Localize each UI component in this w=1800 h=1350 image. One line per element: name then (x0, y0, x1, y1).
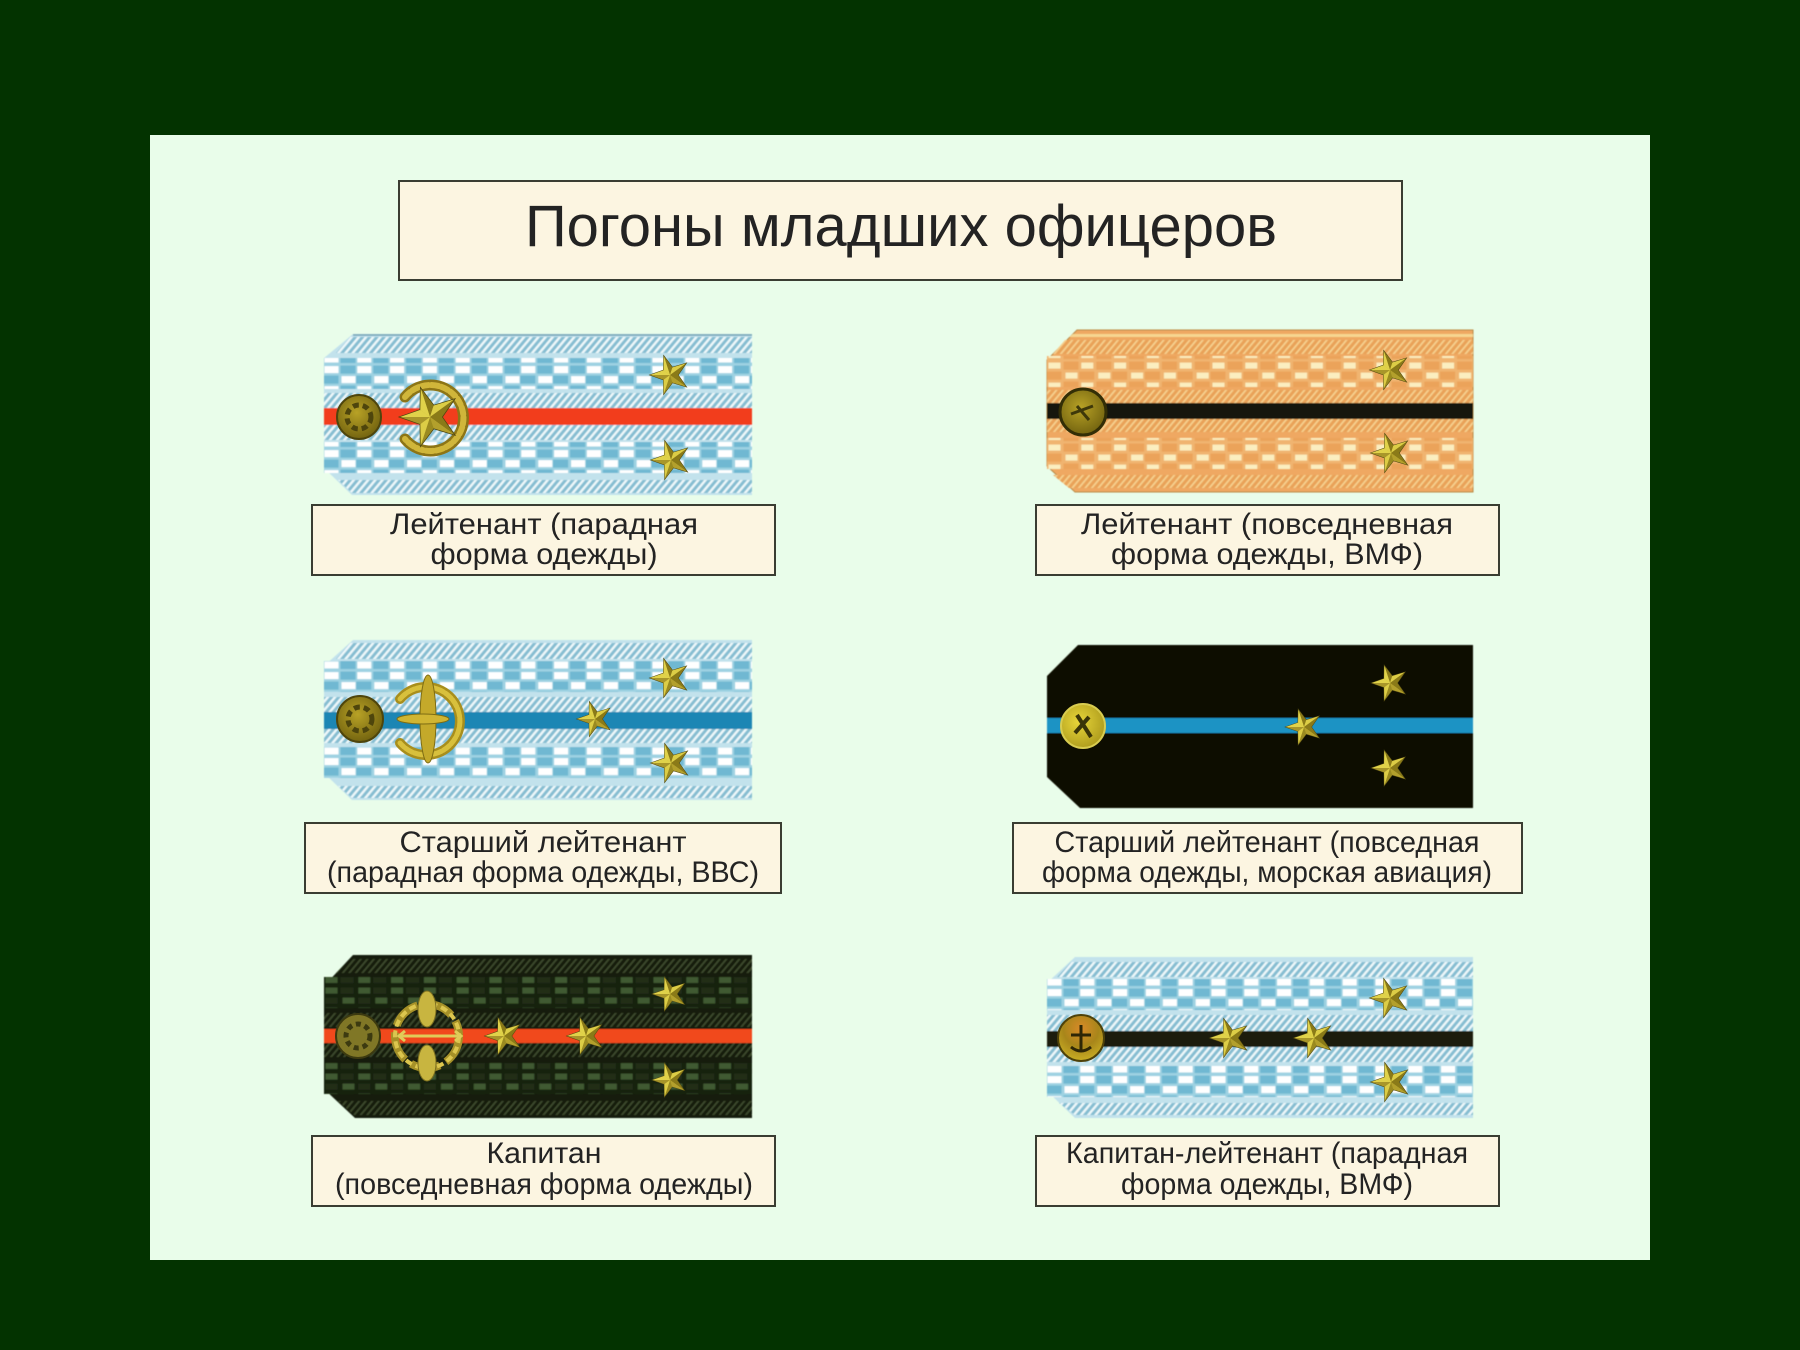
stars (1206, 973, 1414, 1103)
label: Lieutenant-captain, parade, navy: форма одежды, ВМФ) (1121, 1168, 1413, 1201)
button (1061, 704, 1105, 748)
label: Senior lieutenant, everyday, naval aviation (1013, 823, 1522, 893)
button (337, 395, 381, 439)
stars (481, 972, 690, 1099)
shoulder board: Senior lieutenant, everyday, naval aviation (1047, 645, 1473, 808)
title: Погоны младших офицеров (525, 194, 1277, 259)
label: Lieutenant-captain, parade, navy: Капитан-лейтенант (парадная (1066, 1137, 1468, 1170)
label: Lieutenant, everyday, navy: форма одежды, ВМФ) (1111, 538, 1423, 571)
panel: main light-green sheet (150, 135, 1650, 1260)
shoulder board: Senior lieutenant, parade, air force (324, 640, 752, 800)
label: Senior lieutenant, everyday, naval aviation: Старший лейтенант (повседная (1054, 826, 1480, 859)
label: Lieutenant, everyday, navy: Лейтенант (повседневная (1081, 508, 1453, 541)
label: Senior lieutenant, parade, air force: Старший лейтенант (400, 826, 687, 859)
stars (573, 653, 694, 784)
label: Lieutenant, parade: Лейтенант (парадная (390, 508, 698, 541)
emblem: wreath and propeller (395, 991, 461, 1081)
shoulder board: Captain, everyday (324, 955, 752, 1118)
label: Senior lieutenant, parade, air force (305, 823, 781, 893)
label: Lieutenant, parade: форма одежды) (430, 538, 658, 571)
label: Senior lieutenant, everyday, naval aviation: форма одежды, морская авиация) (1042, 856, 1492, 889)
emblem: wreath and star (394, 380, 465, 451)
label: Captain, everyday (312, 1136, 775, 1206)
label: Senior lieutenant, parade, air force: (парадная форма одежды, ВВС) (327, 856, 759, 889)
stars (646, 350, 694, 481)
label: Lieutenant, parade (312, 505, 775, 575)
stars (1282, 660, 1411, 788)
label: Lieutenant-captain, parade, navy (1036, 1136, 1499, 1206)
label: Captain, everyday: Капитан (486, 1137, 602, 1170)
label: Captain, everyday: (повседневная форма одежды) (335, 1168, 753, 1201)
button (337, 696, 383, 742)
button (1058, 1015, 1104, 1061)
stars (1366, 345, 1414, 474)
shoulder board: Lieutenant, everyday, navy (1047, 330, 1473, 492)
button (1060, 389, 1106, 435)
emblem: wreath and wings (397, 675, 460, 763)
shoulder board: Lieutenant-captain, parade, navy (1047, 957, 1473, 1118)
label: Lieutenant, everyday, navy (1036, 505, 1499, 575)
button (336, 1014, 380, 1058)
shoulder board: Lieutenant, parade (324, 334, 752, 495)
title (399, 181, 1402, 280)
